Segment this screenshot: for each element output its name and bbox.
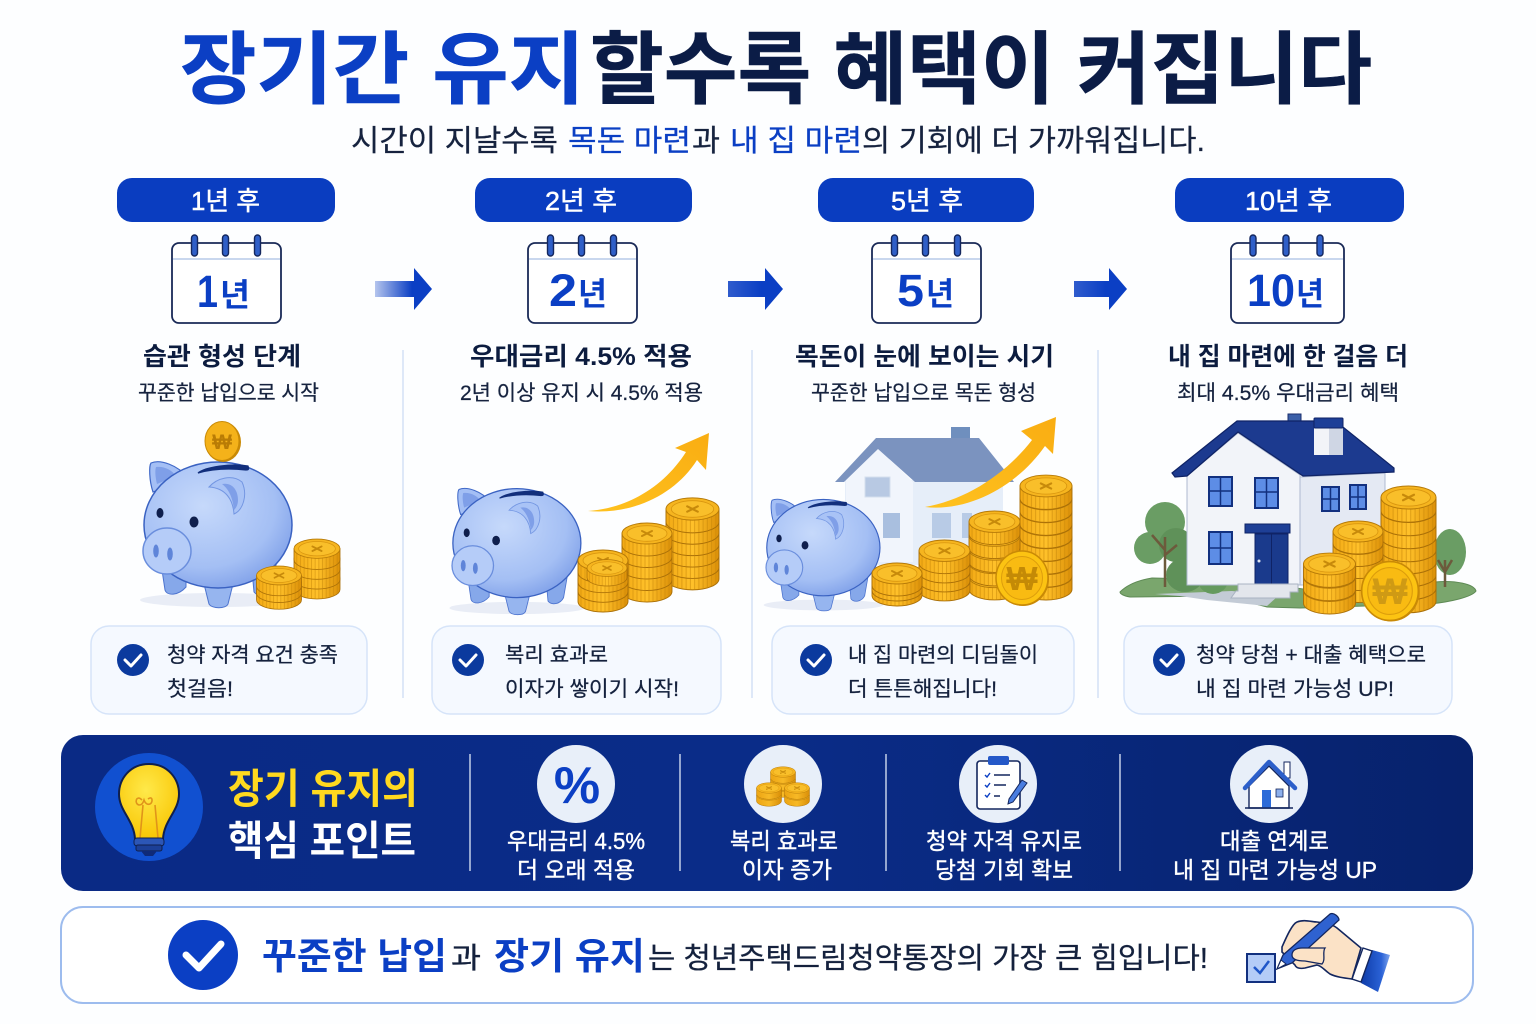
- callout: eligibility: 첫걸음!: [167, 678, 233, 701]
- column dividers: [403, 350, 1098, 698]
- icon: right tree: [1434, 529, 1466, 587]
- arrow 2: [728, 268, 783, 310]
- icon: calendar 5 years: [872, 235, 981, 323]
- icon: house: [1172, 414, 1394, 598]
- arrow 3: [1074, 268, 1127, 310]
- heading: one step closer: 내 집 마련에 한 걸음 더: [1168, 343, 1408, 371]
- icon: won coin: [996, 551, 1049, 606]
- callout: compound interest: [432, 626, 721, 714]
- heading: key points: 핵심 포인트: [228, 818, 416, 864]
- icon: left tree: [1134, 502, 1228, 594]
- icon: hand writing a check: [1247, 914, 1390, 992]
- illustration: house, trees and coins: [1120, 414, 1476, 622]
- icon: calendar 5 years: 년: [926, 276, 954, 312]
- point: loan link: 내 집 마련 가능성 UP: [1173, 857, 1377, 883]
- message text: 는 청년주택드림청약통장의 가장 큰 힘입니다!: [648, 942, 1208, 975]
- icon: calendar 1 year: 1: [197, 266, 218, 317]
- point: preferential rate: [507, 745, 645, 883]
- panel: 2 years: [432, 178, 721, 714]
- heading: preferential rate: 우대금리 4.5% 적용: [470, 343, 692, 371]
- point: compound interest: [730, 745, 838, 883]
- point: subscription eligibility: 당첨 기회 확보: [935, 857, 1073, 883]
- icon: calendar 1 year: [172, 235, 281, 323]
- message text: 장기 유지: [494, 936, 645, 977]
- heading: key points: 장기 유지의: [228, 766, 418, 812]
- subtitle: 의 기회에 더 가까워집니다.: [862, 125, 1205, 158]
- subtitle: 시간이 지날수록: [351, 125, 558, 158]
- subheading: 꾸준한 납입으로 시작: [138, 382, 319, 405]
- heading: habit stage: 습관 형성 단계: [143, 343, 301, 371]
- heading: key points: [228, 766, 418, 864]
- icon: won coin: [1362, 562, 1419, 622]
- icon: calendar 2 years: 년: [578, 276, 607, 312]
- icon: check circle: [168, 920, 238, 990]
- subtitle: 과: [692, 125, 720, 158]
- badge: 10 years later: 10년 후: [1245, 186, 1332, 216]
- point: preferential rate: 더 오래 적용: [517, 857, 635, 883]
- illustration: piggy bank with coin: [140, 422, 340, 609]
- icon: calendar 10 years: 10: [1247, 265, 1295, 316]
- title: 할수록 혜택이 커집니다: [590, 25, 1372, 114]
- subheading: 2년 이상 유지 시 4.5% 적용: [460, 382, 703, 405]
- badge: 5 years later: 5년 후: [891, 186, 963, 216]
- point: preferential rate: 우대금리 4.5%: [507, 828, 645, 854]
- callout: compound interest: 이자가 쌓이기 시작!: [505, 678, 679, 701]
- arrow: growth: [588, 433, 709, 512]
- badge: 5 years later: [818, 178, 1034, 222]
- heading: lump sum visible: 목돈이 눈에 보이는 시기: [795, 343, 1054, 371]
- illustration: faded house, piggy bank and coins: [764, 417, 1072, 611]
- callout: winning plus loan: 청약 당첨 + 대출 혜택으로: [1196, 644, 1426, 667]
- subtitle: [351, 125, 1205, 158]
- badge: 1 year later: 1년 후: [191, 186, 260, 216]
- title: 장기간 유지: [180, 25, 585, 114]
- badge: 1 year later: [117, 178, 335, 222]
- point: compound interest: 복리 효과로: [730, 828, 838, 854]
- message text: 과: [451, 943, 481, 975]
- panel: 10 years: [1120, 178, 1476, 714]
- icon: calendar 10 years: 년: [1296, 276, 1324, 312]
- subheading: 최대 4.5% 우대금리 혜택: [1177, 382, 1399, 405]
- panel: 5 years: [764, 178, 1074, 714]
- callout: compound interest: 복리 효과로: [505, 644, 608, 667]
- message text: [262, 936, 1208, 977]
- subtitle: 목돈 마련: [568, 125, 691, 158]
- icon: light bulb: [95, 753, 203, 861]
- icon: won coin: ₩: [1006, 560, 1038, 597]
- panel: 1 year: [91, 178, 367, 714]
- message text: 꾸준한 납입: [262, 936, 447, 977]
- icon: won coin: ₩: [1373, 571, 1408, 612]
- arrow 1: [375, 268, 432, 310]
- point: loan link: [1173, 745, 1377, 883]
- subtitle: 내 집 마련: [730, 125, 862, 158]
- callout: stepping stone: [772, 626, 1074, 714]
- point: loan link: 대출 연계로: [1220, 828, 1329, 854]
- icon: faded house: [835, 427, 1014, 565]
- icon: calendar 1 year: 년: [220, 277, 250, 313]
- callout: stepping stone: 내 집 마련의 디딤돌이: [848, 644, 1038, 667]
- callout: eligibility: 청약 자격 요건 충족: [167, 644, 338, 667]
- subheading: 꾸준한 납입으로 목돈 형성: [811, 382, 1036, 405]
- panel: key points band: [61, 735, 1473, 891]
- callout: stepping stone: 더 튼튼해집니다!: [848, 678, 997, 701]
- arrow: growth: [925, 417, 1056, 508]
- icon: calendar 2 years: 2: [549, 265, 577, 316]
- title: [180, 25, 1372, 114]
- badge: 2 years later: [475, 178, 692, 222]
- icon: calendar 10 years: [1231, 235, 1344, 323]
- lawn: [1120, 578, 1476, 608]
- icon: calendar 5 years: 5: [897, 265, 924, 316]
- illustration: piggy bank with coin: ₩: [212, 431, 232, 454]
- badge: 2 years later: 2년 후: [545, 186, 617, 216]
- callout: eligibility: [91, 626, 367, 714]
- badge: 10 years later: [1175, 178, 1404, 222]
- point: compound interest: 이자 증가: [742, 857, 832, 883]
- callout: winning plus loan: 내 집 마련 가능성 UP!: [1196, 678, 1394, 701]
- icon: calendar 2 years: [528, 235, 637, 323]
- callout: winning plus loan: [1124, 626, 1452, 714]
- point: preferential rate: %: [554, 757, 600, 815]
- panel: bottom message: [61, 907, 1473, 1003]
- point: subscription eligibility: 청약 자격 유지로: [926, 828, 1082, 854]
- illustration: piggy bank, coins and rising arrow: [449, 433, 719, 615]
- walkway: [1155, 591, 1278, 606]
- point: subscription eligibility: [926, 745, 1082, 883]
